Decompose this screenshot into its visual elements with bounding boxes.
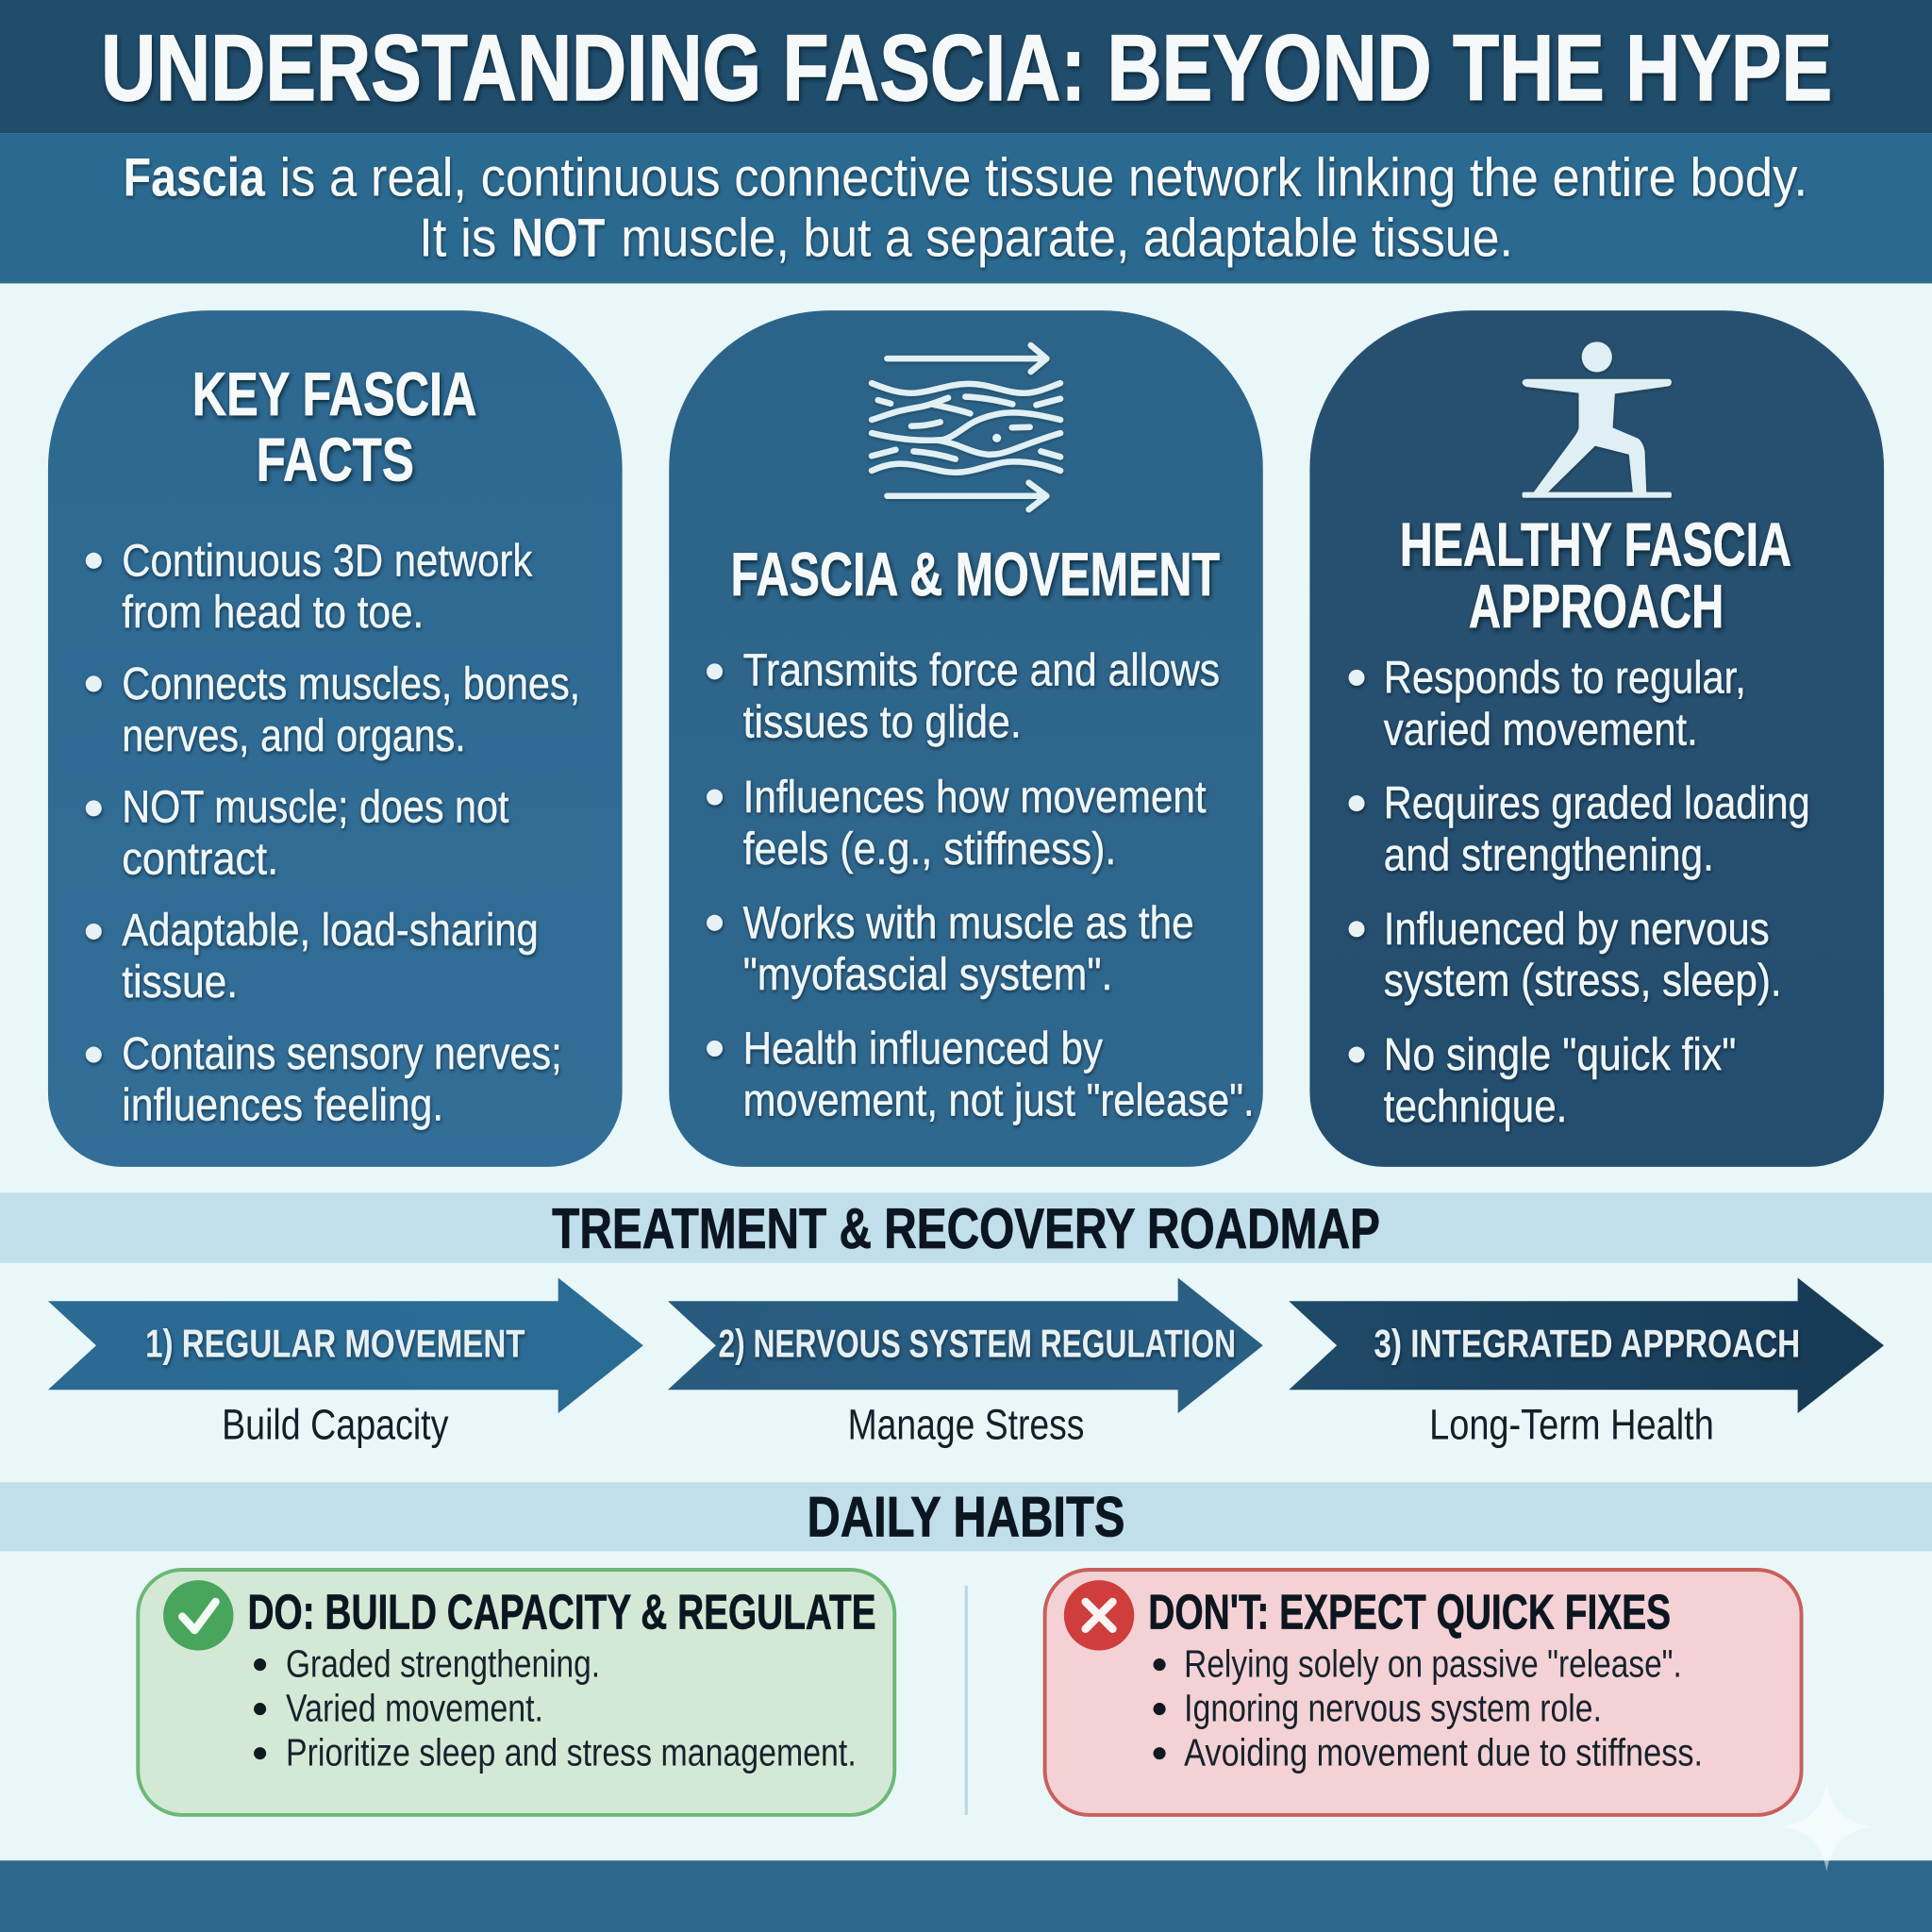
intro text [124,148,1807,269]
fact 2: nerves, and organs. [122,710,466,761]
don't list [1154,1642,1703,1774]
roadmap step 3: Long-Term Health [1429,1401,1714,1449]
approach point 2: Requires graded loading [1384,778,1810,829]
fact 5 [86,1028,562,1131]
heading: healthy fascia approach: APPROACH [1469,572,1724,641]
fact 3: NOT muscle; does not [122,782,509,833]
approach point 1: varied movement. [1384,704,1698,755]
heading: key fascia facts: KEY FASCIA [192,359,476,428]
panel: key fascia facts [48,310,623,1167]
intro text: Fascia [124,148,266,208]
roadmap step 1: Build Capacity [222,1401,449,1449]
movement list [707,645,1255,1125]
don't list: Ignoring nervous system role. [1184,1687,1602,1730]
fact list [86,535,580,1131]
don't list: Relying solely on passive "release". [1184,1642,1682,1686]
heading: key fascia facts: FACTS [257,425,414,493]
approach point 1 [1349,652,1746,755]
intro text: NOT [511,208,605,269]
fact 1: Continuous 3D network [122,535,533,586]
intro text: is a real, continuous connective tissue network linking the entire body. [279,148,1807,208]
roadmap step 2: 2) NERVOUS SYSTEM REGULATION [718,1322,1236,1366]
fact 5: influences feeling. [122,1080,443,1131]
movement point 1: tissues to glide. [743,696,1022,747]
section heading: daily habits: DAILY HABITS [808,1486,1124,1549]
fact 2 [86,658,580,761]
heading: fascia and movement: FASCIA & MOVEMENT [731,540,1220,608]
panel: don't [1045,1570,1802,1815]
approach point 1: Responds to regular, [1384,652,1746,703]
fact 1 [86,535,533,638]
intro banner [0,133,1932,283]
heading: key fascia facts [192,359,476,493]
movement point 1: Transmits force and allows [743,645,1220,696]
panel: healthy fascia approach [1309,310,1884,1167]
footer band [0,1860,1932,1932]
title banner [0,0,1932,133]
movement point 4: movement, not just "release". [743,1074,1255,1125]
panel: fascia and movement [669,310,1263,1167]
section heading: treatment and recovery roadmap: TREATMENT & RECOVERY ROADMAP [552,1197,1380,1260]
fact 5: Contains sensory nerves; [122,1028,562,1079]
icon: cross mark [1064,1580,1134,1651]
don't heading: DON'T: EXPECT QUICK FIXES [1148,1586,1671,1641]
do list: Graded strengthening. [286,1642,600,1686]
approach point 4: technique. [1384,1081,1567,1132]
section heading: daily habits [0,1482,1932,1551]
movement point 2 [707,772,1207,874]
movement point 3 [707,897,1194,1000]
fact 4: Adaptable, load-sharing [122,905,539,956]
heading: healthy fascia approach: HEALTHY FASCIA [1400,510,1791,579]
do list: Varied movement. [286,1687,543,1730]
approach list [1349,652,1810,1132]
movement point 4: Health influenced by [743,1024,1104,1074]
section heading: treatment and recovery roadmap [0,1192,1932,1263]
approach point 3 [1349,904,1782,1007]
fact 4: tissue. [122,957,238,1008]
movement point 2: feels (e.g., stiffness). [743,824,1116,874]
movement point 3: "myofascial system". [743,949,1112,1000]
approach point 3: Influenced by nervous [1384,904,1770,955]
do list: Prioritize sleep and stress management. [286,1731,857,1774]
approach point 3: system (stress, sleep). [1384,956,1782,1007]
roadmap step 1 [48,1277,643,1449]
icon: check mark [163,1580,234,1651]
icon: fascia fibres with force arrows [872,345,1060,509]
don't list: Avoiding movement due to stiffness. [1184,1731,1703,1774]
do heading: DO: BUILD CAPACITY & REGULATE [248,1586,876,1641]
icon: sparkle watermark [1782,1782,1872,1872]
approach point 4 [1349,1029,1736,1132]
approach point 2: and strengthening. [1384,830,1714,881]
roadmap step 2 [668,1277,1263,1449]
movement point 2: Influences how movement [743,772,1207,823]
approach point 4: No single "quick fix" [1384,1029,1736,1080]
movement point 4 [707,1024,1255,1125]
approach point 2 [1349,778,1810,881]
movement point 3: Works with muscle as the [743,897,1194,948]
roadmap step 1: 1) REGULAR MOVEMENT [145,1322,525,1366]
fact 3 [86,782,509,884]
roadmap step 2: Manage Stress [848,1401,1084,1449]
intro text: muscle, but a separate, adaptable tissue. [621,208,1513,269]
fact 2: Connects muscles, bones, [122,658,580,709]
fact 3: contract. [122,833,278,884]
do list [254,1642,857,1774]
roadmap step 3: 3) INTEGRATED APPROACH [1374,1322,1800,1366]
icon: warrior pose figure [1523,341,1672,498]
movement point 1 [707,645,1220,747]
roadmap step 3 [1289,1277,1884,1449]
fact 1: from head to toe. [122,587,424,638]
heading: healthy fascia approach [1400,510,1791,641]
panel: do [138,1570,894,1815]
intro text: It is [419,208,496,269]
fact 4 [86,905,539,1008]
